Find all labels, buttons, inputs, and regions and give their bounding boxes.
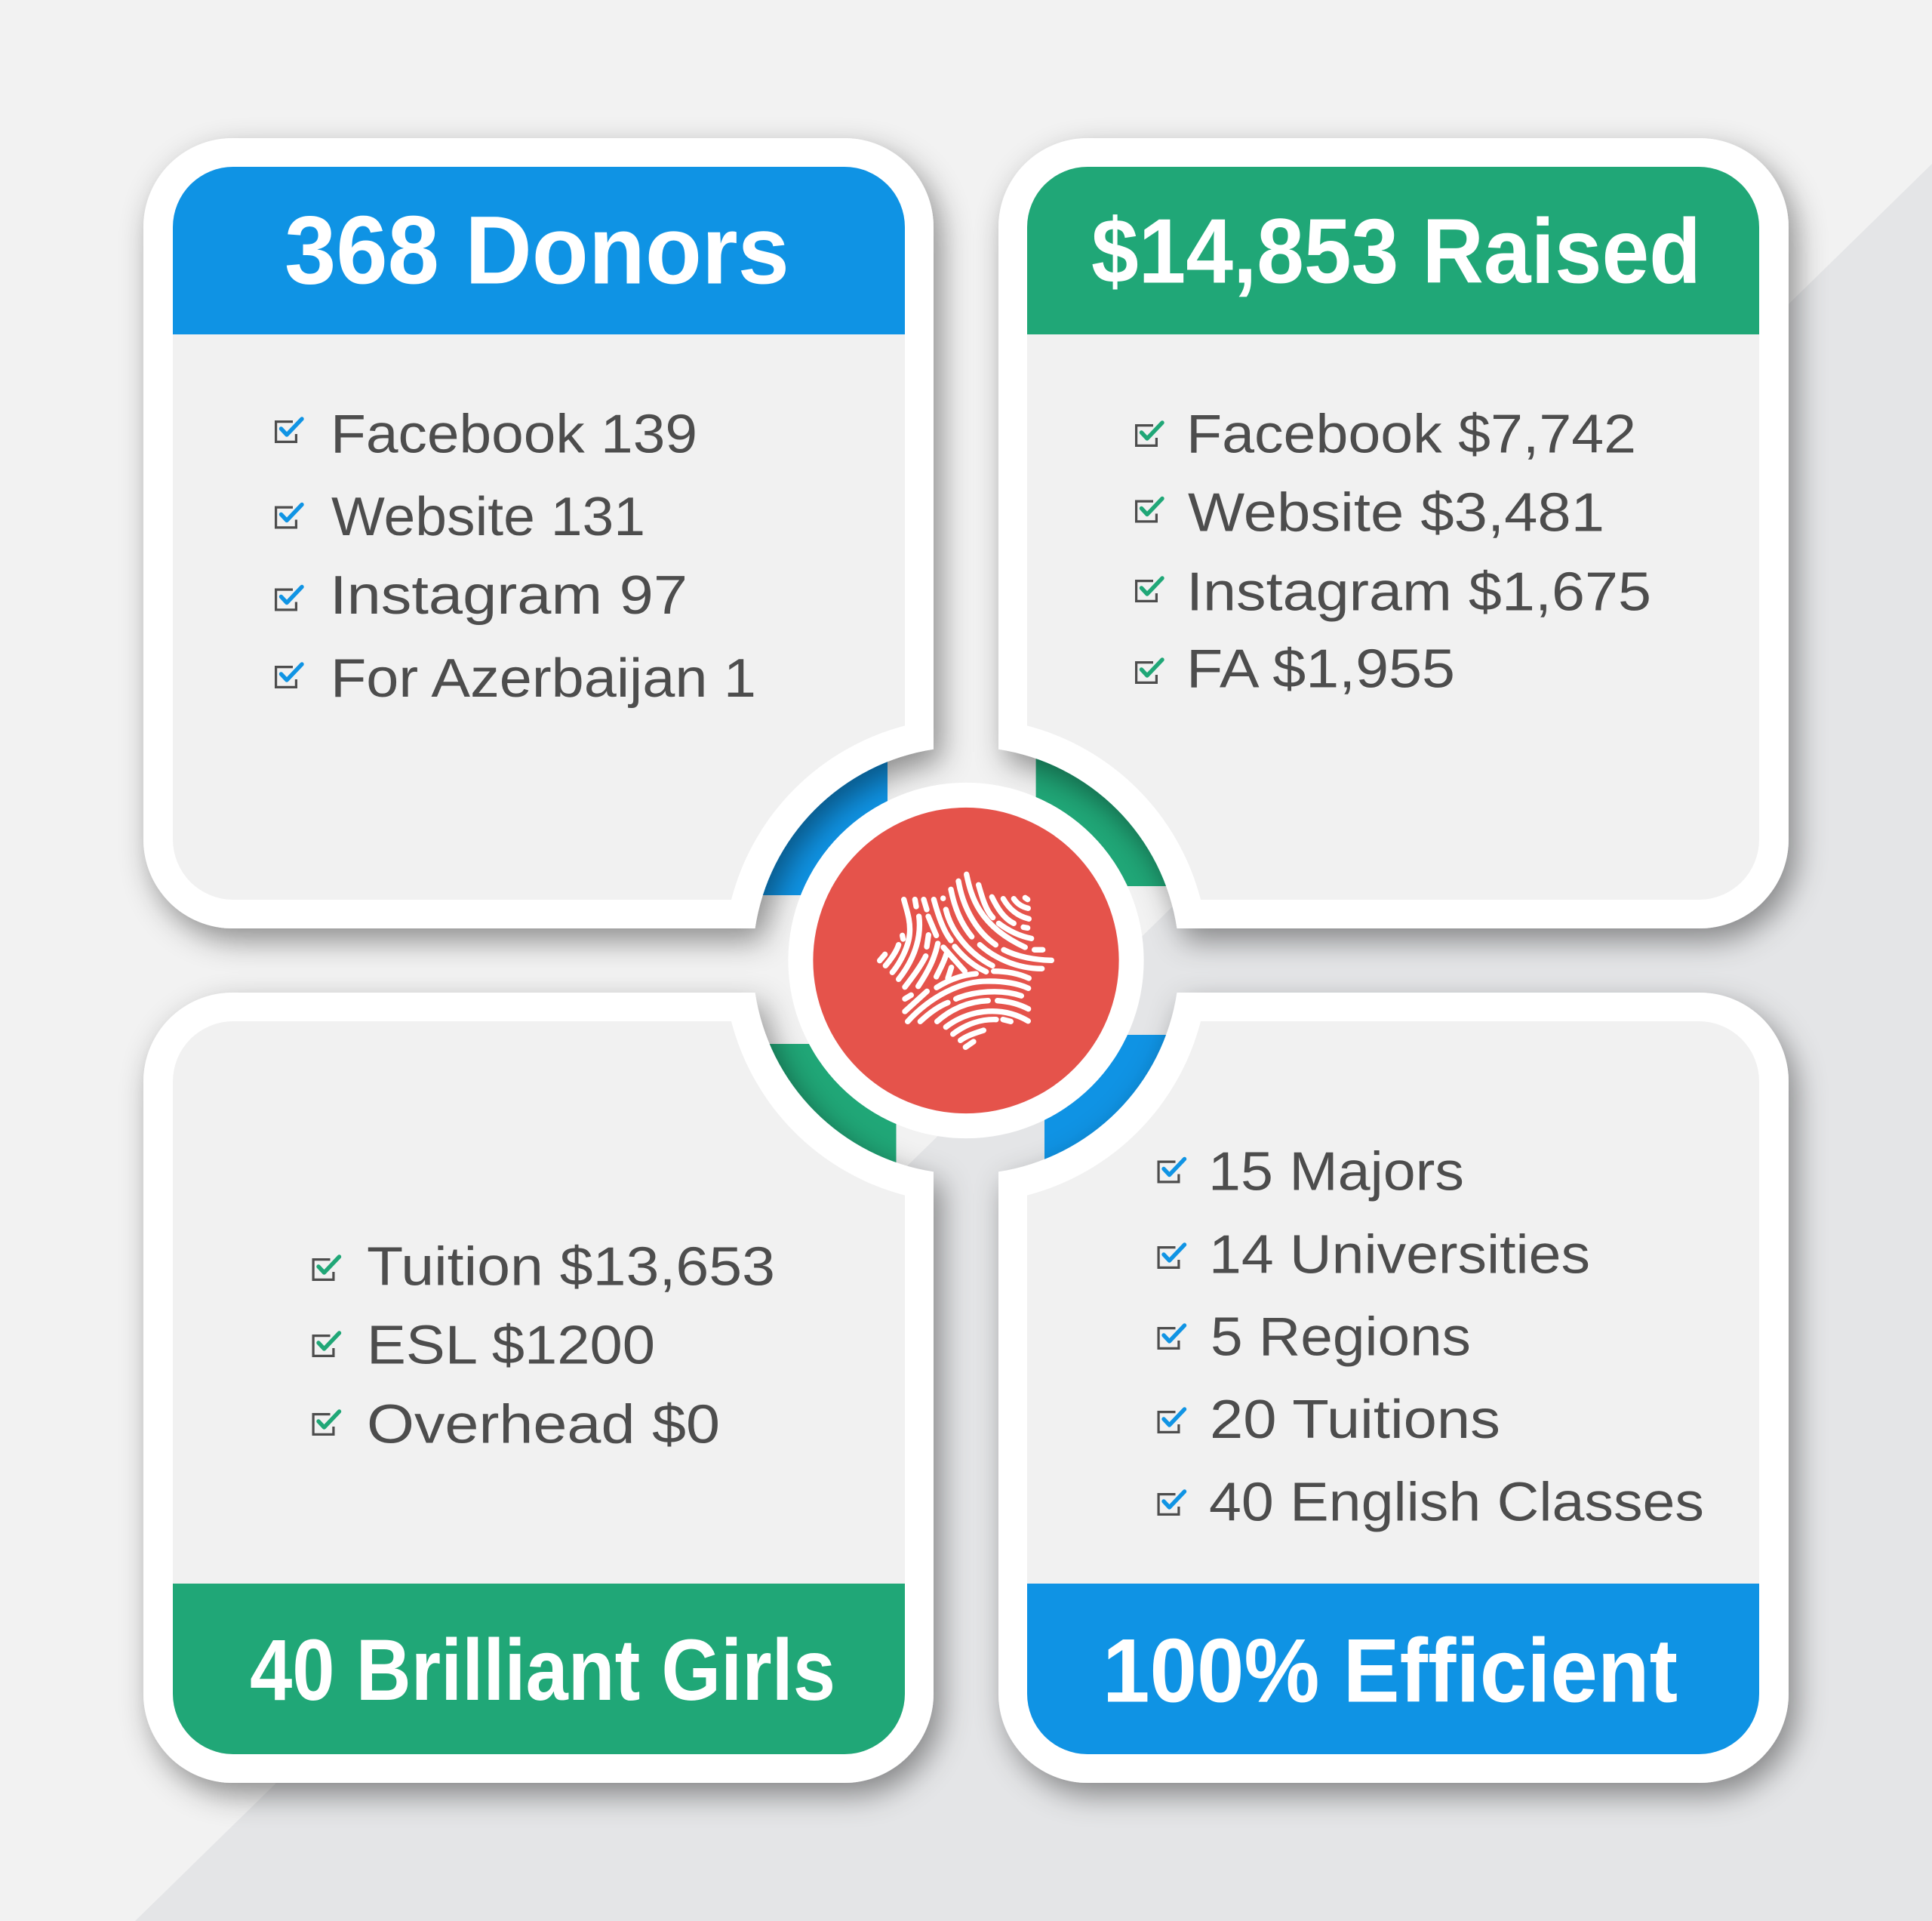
heading: $14,853 Raised: $14,853 Raised	[1091, 199, 1701, 302]
list item: FA $1,955: FA $1,955	[1186, 639, 1455, 699]
heading: 368 Donors: 368 Donors	[285, 196, 789, 305]
list item: Facebook $7,742: Facebook $7,742	[1186, 405, 1636, 465]
panel: raised	[998, 138, 1789, 928]
panel: girls	[143, 993, 934, 1783]
ring segments around the centre	[770, 764, 1162, 1156]
list item: 14 Universities: 14 Universities	[1209, 1224, 1590, 1285]
list item: Website 131: Website 131	[331, 487, 645, 547]
heading: 100% Efficient: 100% Efficient	[1103, 1620, 1678, 1721]
list item: 40 English Classes: 40 English Classes	[1209, 1472, 1704, 1532]
list item: For Azerbaijan 1: For Azerbaijan 1	[331, 648, 756, 709]
list item: 20 Tuitions: 20 Tuitions	[1210, 1390, 1500, 1450]
icon: fingerprint star	[880, 874, 1051, 1047]
panel: efficiency	[998, 993, 1789, 1783]
list item: Instagram 97: Instagram 97	[330, 565, 688, 626]
heading: 40 Brilliant Girls: 40 Brilliant Girls	[250, 1622, 835, 1719]
list item: Website $3,481: Website $3,481	[1188, 483, 1604, 543]
centre badge	[788, 783, 1144, 1138]
list item: 5 Regions: 5 Regions	[1211, 1307, 1471, 1368]
list item: 15 Majors: 15 Majors	[1208, 1141, 1464, 1202]
list item: ESL $1200: ESL $1200	[367, 1315, 655, 1375]
list item: Facebook 139: Facebook 139	[331, 405, 697, 465]
list item: Instagram $1,675: Instagram $1,675	[1186, 562, 1651, 622]
list item: Tuition $13,653: Tuition $13,653	[367, 1236, 775, 1297]
list item: Overhead $0: Overhead $0	[367, 1395, 720, 1455]
panel: donors	[143, 138, 934, 928]
